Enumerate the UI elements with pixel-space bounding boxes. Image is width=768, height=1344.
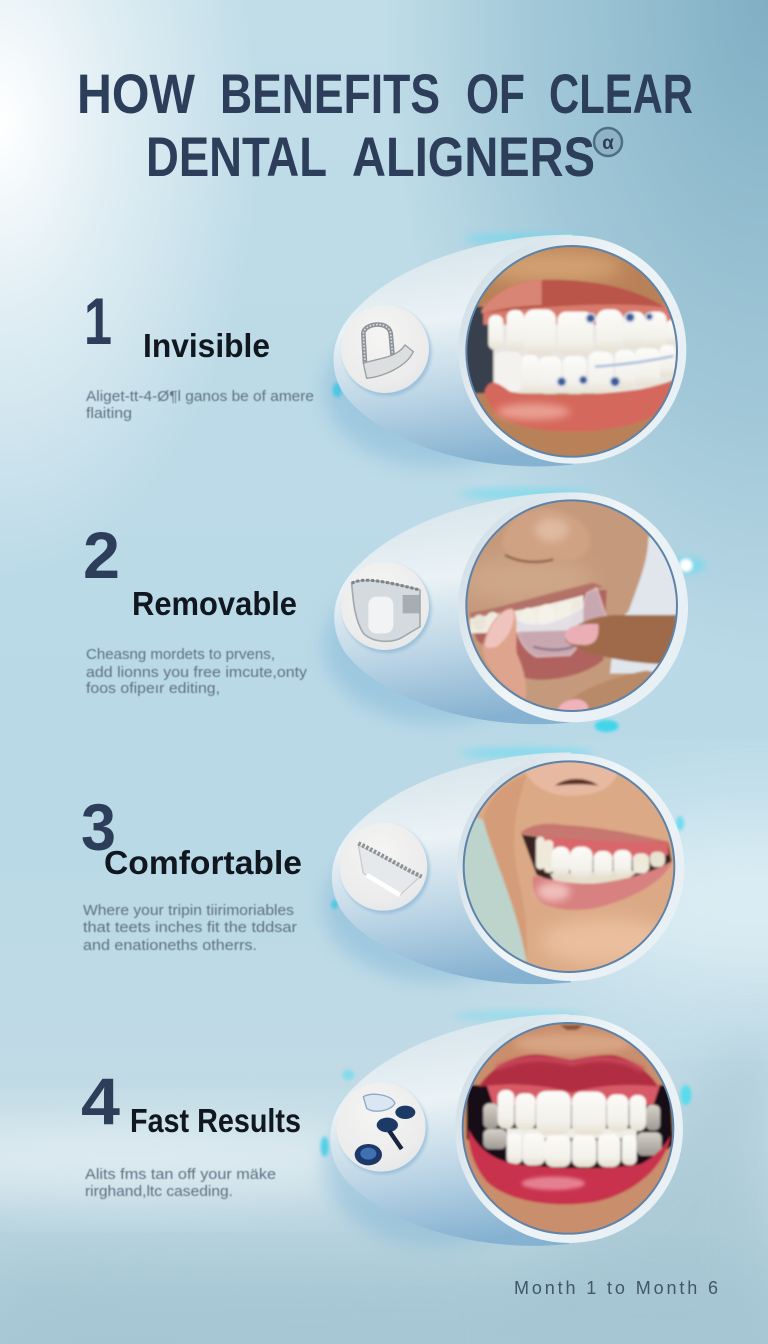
lens ring bbox=[458, 236, 686, 464]
panel: removable text bbox=[83, 518, 308, 697]
number 1: 1 bbox=[84, 284, 112, 358]
nose bbox=[525, 762, 618, 796]
description 2: foos ofipeır editing, bbox=[86, 680, 220, 697]
glow bbox=[323, 233, 590, 467]
upper teeth bbox=[488, 309, 677, 394]
capsule body bbox=[332, 752, 571, 984]
icon disc: aligner block bbox=[341, 562, 431, 653]
description 2: add lionns you free imcute,onty bbox=[86, 664, 308, 681]
lower lip bbox=[468, 1129, 671, 1204]
icon disc: aligner and blue attachments bbox=[336, 1082, 428, 1174]
lower hand bbox=[572, 670, 653, 708]
number 3: 3 bbox=[81, 790, 116, 864]
photo: smile with brackets bbox=[463, 243, 683, 463]
title: CLEAR bbox=[549, 62, 693, 125]
description 4: rirghand,ltc caseding. bbox=[85, 1183, 233, 1200]
title: HOW bbox=[77, 62, 195, 125]
description 4: Alits fms tan off your mäke bbox=[85, 1166, 276, 1183]
panel: invisible illustration bbox=[323, 233, 686, 467]
nose bbox=[504, 510, 588, 555]
lens ring bbox=[455, 1015, 683, 1243]
lens ring bbox=[458, 492, 688, 722]
panel: fast results illustration bbox=[321, 1011, 691, 1246]
heading: Fast Results: Fast Results bbox=[130, 1102, 301, 1139]
icon disc: U-shaped aligner bbox=[341, 305, 431, 396]
title: α bbox=[602, 133, 614, 154]
left finger bbox=[483, 608, 526, 700]
title: DENTAL bbox=[146, 125, 327, 188]
title: BENEFITS bbox=[220, 62, 440, 125]
description 1: flaiting bbox=[86, 405, 132, 422]
description 3 bbox=[83, 902, 297, 954]
description 2 bbox=[86, 646, 308, 697]
capsule body bbox=[334, 235, 572, 466]
description 3: and enationeths otherrs. bbox=[83, 937, 257, 954]
panel: comfortable text bbox=[81, 790, 302, 954]
brackets bbox=[557, 313, 653, 387]
upper lip bbox=[520, 824, 668, 843]
glow bbox=[321, 1011, 691, 1245]
right finger bbox=[565, 615, 678, 664]
panel: fast results text bbox=[81, 1064, 301, 1200]
description 2: Cheasng mordets to prvens, bbox=[86, 646, 275, 663]
panel: removable illustration bbox=[323, 489, 706, 732]
timeline caption: Month 1 to Month 6 bbox=[514, 1278, 718, 1298]
capsule body bbox=[334, 492, 573, 724]
description 1: Aliget-tt-4-Ø¶l ganos be of amere bbox=[86, 388, 314, 405]
description 3: that teets inches fit the tddsar bbox=[83, 919, 297, 936]
photo: removing the aligner bbox=[467, 501, 676, 710]
lower lip bbox=[485, 378, 677, 432]
panel: invisible text bbox=[84, 284, 314, 422]
heading: Comfortable: Comfortable bbox=[104, 844, 302, 881]
teeth bbox=[536, 837, 665, 879]
title: OF bbox=[466, 62, 525, 125]
lens ring bbox=[457, 754, 684, 981]
gum and mouth bbox=[522, 834, 672, 882]
photo: natural smile bbox=[460, 758, 680, 978]
teeth bbox=[483, 1090, 662, 1167]
title: ALIGNERS bbox=[352, 125, 595, 188]
mouth bbox=[470, 590, 607, 680]
description 1 bbox=[86, 388, 314, 422]
panel: comfortable illustration bbox=[323, 748, 684, 984]
glow bbox=[323, 489, 706, 732]
heading: Removable: Removable bbox=[132, 585, 297, 622]
number 2: 2 bbox=[83, 518, 120, 592]
photo: straight white teeth bbox=[460, 1022, 680, 1242]
capsule body bbox=[330, 1014, 569, 1246]
title bbox=[77, 62, 693, 188]
aligner tray bbox=[515, 588, 606, 657]
description 3: Where your tripin tiirimoriables bbox=[83, 902, 294, 919]
heading: Invisible: Invisible bbox=[143, 327, 270, 364]
icon disc: aligner strip bbox=[339, 823, 430, 914]
upper lip bbox=[478, 1054, 658, 1092]
lower lip bbox=[533, 862, 672, 910]
number 4: 4 bbox=[81, 1064, 120, 1138]
description 4 bbox=[85, 1166, 276, 1200]
glow bbox=[323, 748, 684, 982]
upper lip bbox=[482, 280, 665, 313]
